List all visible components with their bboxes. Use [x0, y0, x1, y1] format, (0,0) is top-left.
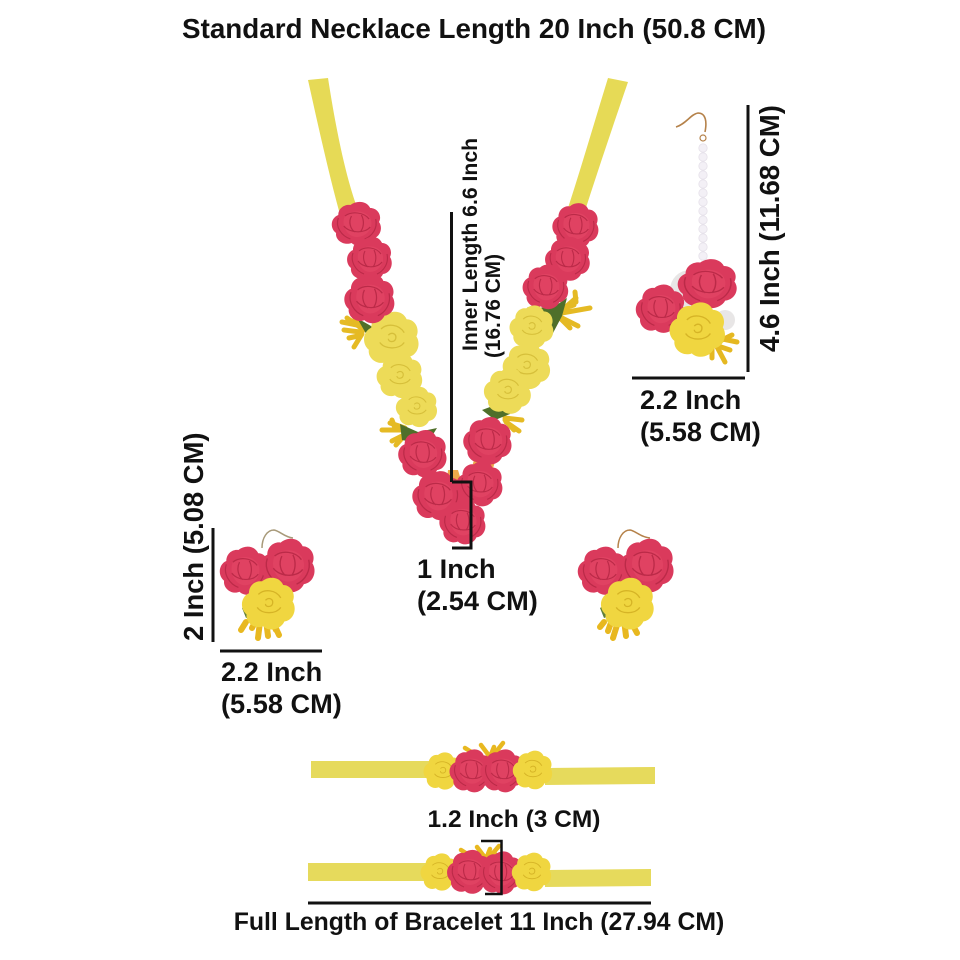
- top bracelet stamens: [465, 743, 503, 760]
- wrist label: 1.2 Inch (3 CM): [428, 806, 600, 833]
- right earring leaf: [600, 602, 614, 618]
- tikka pearls: [699, 144, 707, 260]
- title: Standard Necklace Length 20 Inch (50.8 CM): [182, 13, 766, 44]
- tikka width cm label: (5.58 CM): [640, 416, 761, 447]
- necklace bottom flowers: [412, 471, 462, 520]
- 1 inch bracket: [452, 482, 471, 548]
- bracelet width bracket: [481, 841, 502, 894]
- tikka height label: 4.6 Inch (11.68 CM): [754, 105, 785, 352]
- top bracelet flowers: [424, 752, 461, 790]
- inner length measure line: [450, 212, 453, 482]
- left earring flowers: [220, 547, 269, 595]
- left earring stamens: [241, 618, 279, 638]
- top bracelet: [311, 743, 655, 792]
- left earring hook: [262, 530, 293, 548]
- 1 inch cm label: (2.54 CM): [417, 585, 538, 616]
- top bracelet ribbon: [311, 761, 655, 785]
- tikka backing: [670, 270, 710, 310]
- tikka flowers: [636, 285, 685, 333]
- left earring height label: 2 Inch (5.08 CM): [178, 432, 209, 641]
- right earring flowers: [578, 547, 627, 595]
- tikka stamens: [712, 335, 737, 362]
- 1 inch label: 1 Inch: [417, 553, 496, 584]
- inner length label cm: (16.76 CM): [482, 254, 505, 358]
- bottom bracelet flowers: [421, 853, 458, 891]
- left earring width line: [220, 650, 322, 652]
- right earring stamens: [600, 620, 637, 638]
- bottom bracelet: [308, 846, 651, 894]
- left earring height line: [212, 528, 214, 642]
- right earring: [578, 530, 674, 638]
- left earring leaf: [242, 602, 256, 618]
- tikka width line: [632, 376, 745, 380]
- necklace: [308, 78, 628, 544]
- tikka hook: [676, 113, 706, 132]
- bracelet length line: [308, 902, 651, 904]
- left earring width cm label: (5.58 CM): [221, 688, 342, 719]
- necklace stamens: [342, 292, 590, 445]
- left earring: [220, 530, 315, 638]
- left earring width label: 2.2 Inch: [221, 656, 322, 687]
- tikka height line: [746, 105, 750, 372]
- necklace right flowers: [552, 203, 598, 248]
- necklace right ribbon: [568, 78, 628, 214]
- maang tikka: [636, 113, 737, 362]
- tikka width label: 2.2 Inch: [640, 384, 741, 415]
- inner length label: Inner Length 6.6 Inch: [459, 138, 482, 351]
- necklace leaves: [357, 318, 393, 337]
- necklace lower ribbon pieces: [444, 470, 470, 540]
- bottom bracelet stamens: [461, 846, 499, 862]
- bottom bracelet ribbon: [308, 863, 651, 887]
- necklace left flowers: [364, 312, 419, 365]
- necklace left ribbon: [308, 78, 358, 225]
- bracelet length label: Full Length of Bracelet 11 Inch (27.94 CM): [234, 909, 724, 936]
- right earring hook: [618, 530, 650, 548]
